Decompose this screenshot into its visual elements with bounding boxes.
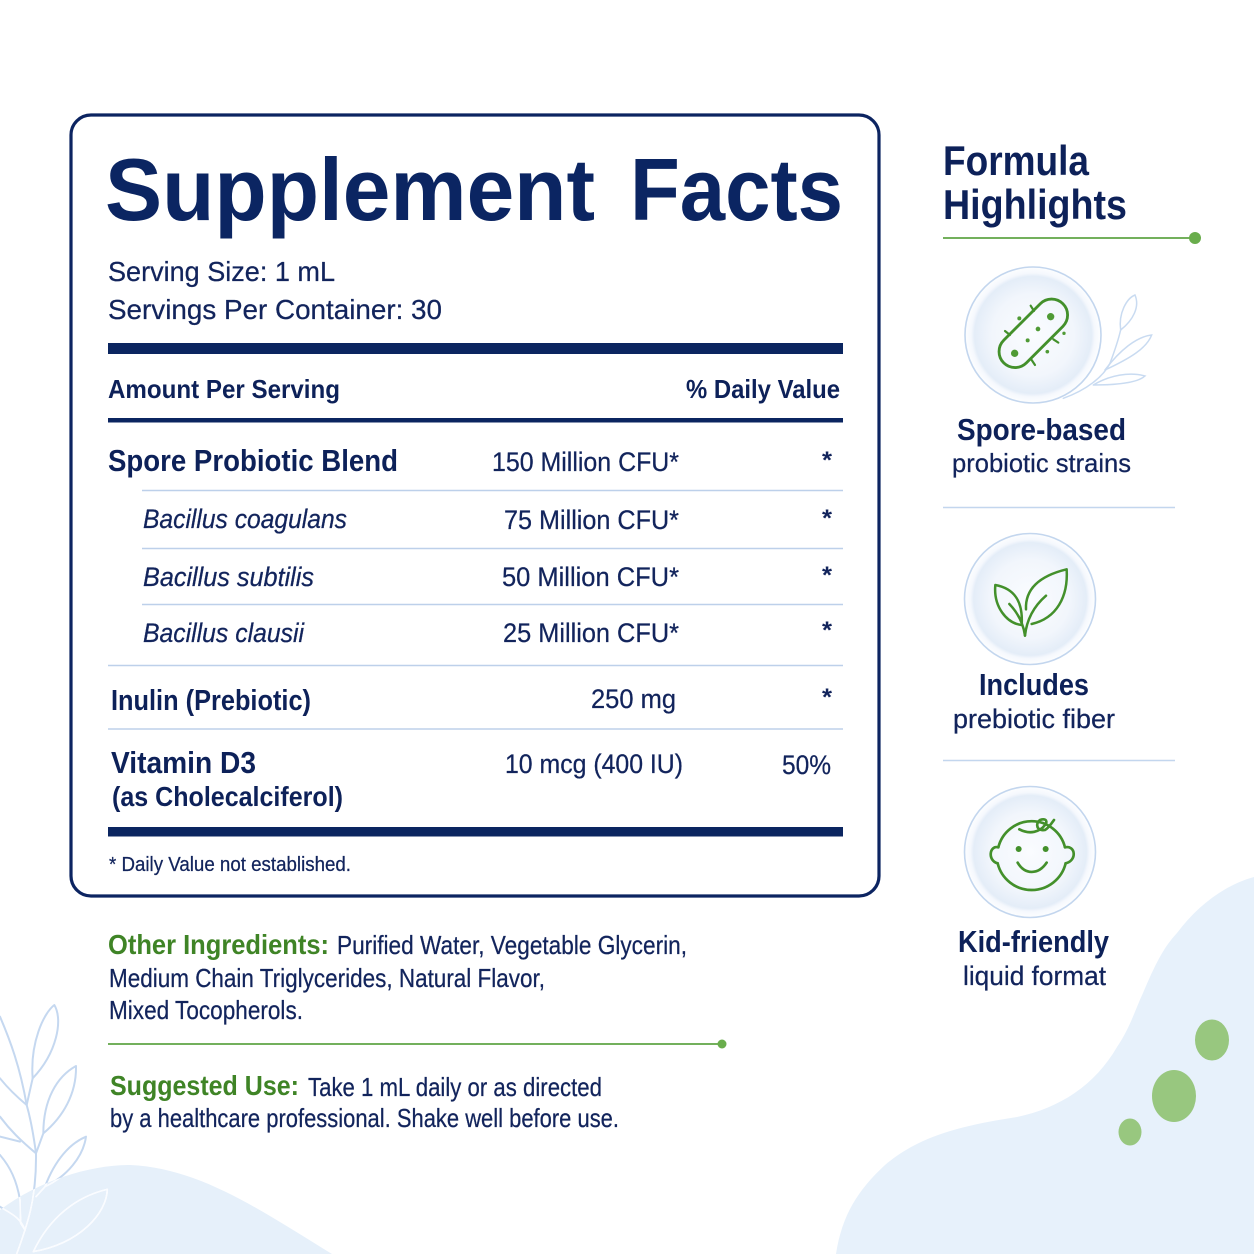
row: spore probiotic blend bbox=[108, 443, 833, 478]
serving info: Serving Size: 1 mL bbox=[108, 256, 335, 287]
heading: formula highlights bbox=[943, 137, 1127, 228]
row: spore probiotic blend: 150 Million CFU* bbox=[492, 447, 679, 477]
row: vitamin d3: Vitamin D3 bbox=[111, 745, 256, 780]
row: bacillus subtilis: 50 Million CFU* bbox=[502, 562, 679, 592]
footnote: * Daily Value not established. bbox=[109, 854, 351, 876]
heading underline with dot bbox=[943, 232, 1201, 244]
label: prebiotic fiber: Includes bbox=[979, 667, 1089, 702]
title: Supplement bbox=[105, 140, 595, 239]
background blob: bottom right bbox=[836, 877, 1254, 1254]
row: vitamin d3: 10 mcg (400 IU) bbox=[505, 749, 683, 779]
row: inulin: Inulin (Prebiotic) bbox=[111, 685, 311, 717]
label: kid-friendly: Kid-friendly bbox=[958, 924, 1110, 959]
label: spore-based: Spore-based bbox=[957, 412, 1126, 447]
decorative green dots bbox=[1118, 1020, 1229, 1146]
bottom thick divider bbox=[108, 827, 843, 836]
other ingredients text: Mixed Tocopherols. bbox=[109, 995, 303, 1025]
suggested use text: Take 1 mL daily or as directed bbox=[308, 1072, 602, 1102]
heading: formula highlights: Formula bbox=[943, 137, 1090, 184]
row: inulin bbox=[111, 684, 833, 717]
suggested use text: Suggested Use: bbox=[110, 1070, 299, 1101]
green divider with dot bbox=[108, 1040, 726, 1048]
row: bacillus coagulans bbox=[143, 504, 833, 535]
row: bacillus clausii bbox=[143, 617, 833, 648]
title bbox=[105, 140, 843, 239]
row: vitamin d3: (as Cholecalciferol) bbox=[112, 781, 343, 812]
label: kid-friendly: liquid format bbox=[963, 961, 1106, 991]
other ingredients text: Purified Water, Vegetable Glycerin, bbox=[337, 930, 687, 960]
suggested use text: by a healthcare professional. Shake well before use. bbox=[110, 1103, 619, 1133]
other ingredients text: Other Ingredients: bbox=[108, 929, 329, 960]
label: spore-based bbox=[952, 412, 1131, 478]
row: bacillus subtilis: * bbox=[822, 562, 833, 589]
row: spore probiotic blend: * bbox=[822, 447, 833, 474]
highlight: prebiotic fiber bbox=[953, 534, 1115, 734]
other ingredients text bbox=[108, 929, 687, 1025]
highlight: kid-friendly bbox=[958, 786, 1110, 991]
row: vitamin d3 bbox=[111, 745, 831, 812]
row: bacillus clausii: Bacillus clausii bbox=[143, 618, 305, 648]
row: spore probiotic blend: Spore Probiotic Blend bbox=[108, 443, 398, 478]
panel: supplement facts bbox=[71, 115, 879, 896]
column headers bbox=[108, 374, 840, 404]
top thick divider bbox=[108, 343, 843, 354]
title: Facts bbox=[630, 140, 843, 239]
icon: baby face in circle bbox=[964, 786, 1096, 918]
row: bacillus coagulans: 75 Million CFU* bbox=[504, 505, 679, 535]
row: bacillus coagulans: * bbox=[822, 505, 833, 532]
row: vitamin d3: 50% bbox=[782, 750, 831, 780]
row: bacillus clausii: * bbox=[822, 617, 833, 644]
serving info: Servings Per Container: 30 bbox=[108, 294, 442, 325]
suggested use text bbox=[110, 1070, 619, 1133]
label: spore-based: probiotic strains bbox=[952, 448, 1131, 478]
label: kid-friendly bbox=[958, 924, 1110, 991]
column headers: Amount Per Serving bbox=[108, 374, 340, 404]
heading: formula highlights: Highlights bbox=[943, 181, 1127, 228]
panel border bbox=[71, 115, 879, 896]
icon: bacterium in circle bbox=[965, 267, 1101, 403]
row: bacillus clausii: 25 Million CFU* bbox=[503, 618, 679, 648]
label: prebiotic fiber: prebiotic fiber bbox=[953, 704, 1115, 734]
label: prebiotic fiber bbox=[953, 667, 1115, 734]
row: inulin: * bbox=[822, 684, 833, 711]
serving info bbox=[108, 256, 442, 325]
column headers: % Daily Value bbox=[686, 374, 840, 404]
highlight: spore-based bbox=[952, 267, 1152, 478]
decorative plant: bottom left bbox=[0, 1005, 107, 1254]
icon: sprig bbox=[1063, 295, 1152, 398]
row: bacillus subtilis bbox=[143, 562, 833, 592]
other ingredients text: Medium Chain Triglycerides, Natural Flavor, bbox=[109, 963, 545, 993]
row: bacillus coagulans: Bacillus coagulans bbox=[143, 504, 347, 534]
icon: leaf in circle bbox=[964, 534, 1096, 664]
row: bacillus subtilis: Bacillus subtilis bbox=[143, 562, 314, 592]
background blob: bottom left bbox=[0, 1165, 332, 1254]
row: inulin: 250 mg bbox=[591, 684, 676, 714]
